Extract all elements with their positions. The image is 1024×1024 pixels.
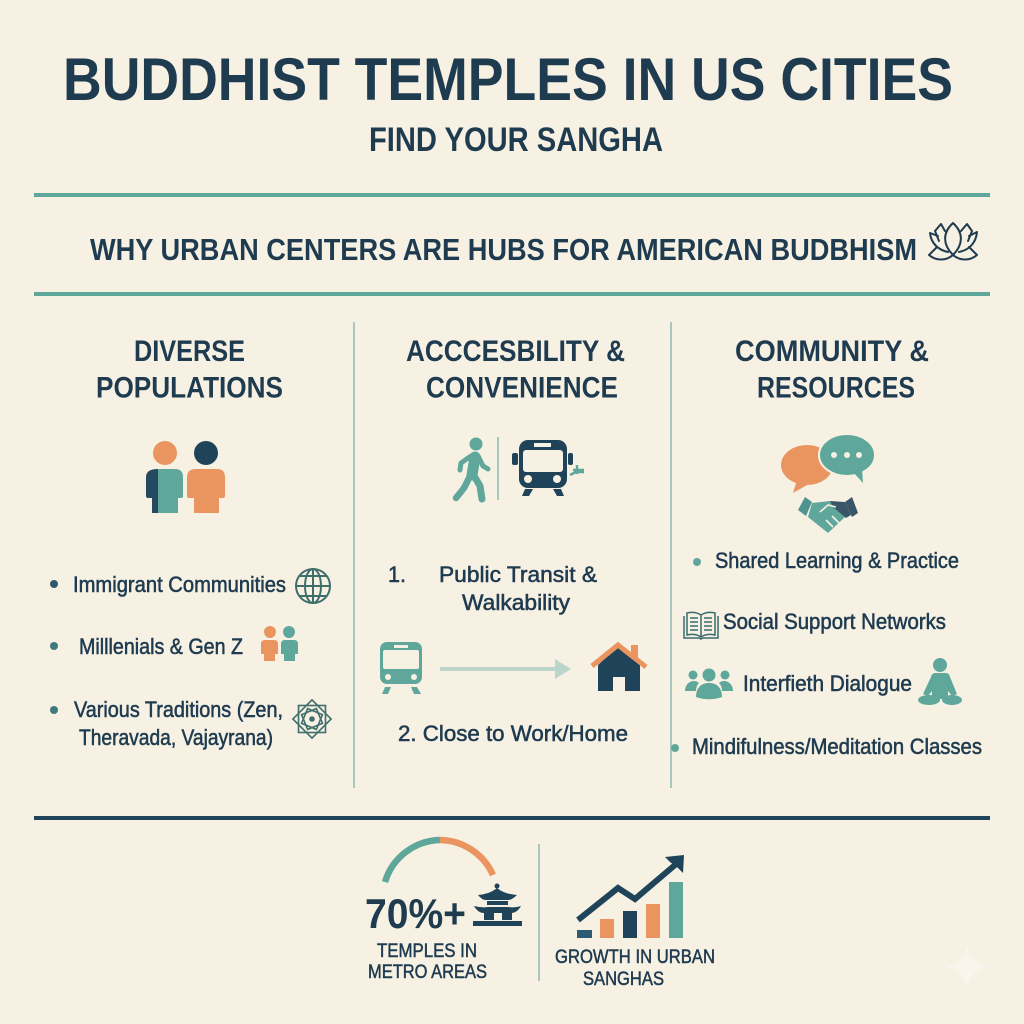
heading: community — [735, 335, 929, 404]
panel: accessibility and convenience — [380, 335, 646, 746]
icon: handshake — [798, 497, 858, 533]
icon: speech bubbles — [781, 434, 875, 493]
icon: train — [380, 642, 422, 694]
icon: group of people — [685, 668, 733, 699]
number: 70%+ — [365, 890, 466, 937]
label: TEMPLES IN — [377, 941, 477, 962]
list item: various traditions — [50, 697, 283, 750]
list item: various traditions: Various Traditions (Zen, — [74, 697, 283, 722]
list item: mindfulness: Mindifulness/Meditation Classes — [692, 734, 982, 759]
heading: diverse populations: DIVERSE — [134, 335, 245, 368]
heading: community: RESOURCES — [757, 372, 915, 404]
subtitle: FIND YOUR SANGHA — [369, 121, 663, 159]
icon: globe — [296, 569, 330, 603]
stat: 70% temples in metro areas — [365, 840, 522, 983]
stat: growth in urban sanghas — [555, 855, 715, 990]
list item: shared learning: Shared Learning & Practice — [715, 548, 959, 573]
icon: book — [684, 612, 718, 639]
icon: two people — [146, 441, 225, 513]
list item: public transit: 1. — [388, 562, 406, 587]
bar chart — [577, 882, 683, 938]
list item: public transit: Walkability — [462, 590, 570, 615]
panel: diverse populations — [50, 335, 331, 750]
label: SANGHAS — [583, 969, 664, 990]
list item: social support: Social Support Networks — [723, 609, 946, 634]
icon: walking person — [456, 438, 488, 499]
list item: immigrant communities: Immigrant Communities — [73, 572, 286, 597]
arrow — [440, 659, 571, 679]
list item: millennials: Milllenials & Gen Z — [79, 634, 243, 659]
heading: accessibility: CONVENIENCE — [426, 372, 618, 404]
heading: accessibility: ACCCESBILITY & — [406, 335, 625, 368]
section heading: WHY URBAN CENTERS ARE HUBS FOR AMERICAN BUDBHISM — [90, 232, 917, 267]
icon: small people — [261, 626, 298, 661]
heading: diverse populations — [96, 335, 283, 404]
heading: community: COMMUNITY & — [735, 335, 929, 368]
heading: diverse populations: POPULATIONS — [96, 372, 283, 404]
list item: interfaith dialogue: Interfieth Dialogue — [743, 671, 912, 696]
label — [555, 947, 715, 990]
panel: community and resources — [671, 335, 982, 759]
label: GROWTH IN URBAN — [555, 947, 715, 968]
arrow: growth trend — [578, 855, 684, 920]
icon: sparkle watermark — [945, 945, 989, 989]
list item: close to work: 2. Close to Work/Home — [398, 721, 628, 746]
icon: bus — [512, 440, 584, 496]
icon: lotus — [929, 223, 977, 260]
icon: mandala — [293, 700, 331, 738]
gauge arc — [385, 840, 493, 882]
label — [368, 941, 487, 983]
label: METRO AREAS — [368, 962, 487, 983]
icon: temple — [473, 884, 522, 926]
list item: various traditions: Theravada, Vajayrana) — [79, 725, 273, 750]
list item: public transit: Public Transit & — [439, 562, 597, 587]
icon: house — [592, 645, 646, 691]
heading: accessibility — [406, 335, 625, 404]
icon: meditating person — [918, 658, 962, 705]
list item: public transit — [388, 562, 597, 615]
